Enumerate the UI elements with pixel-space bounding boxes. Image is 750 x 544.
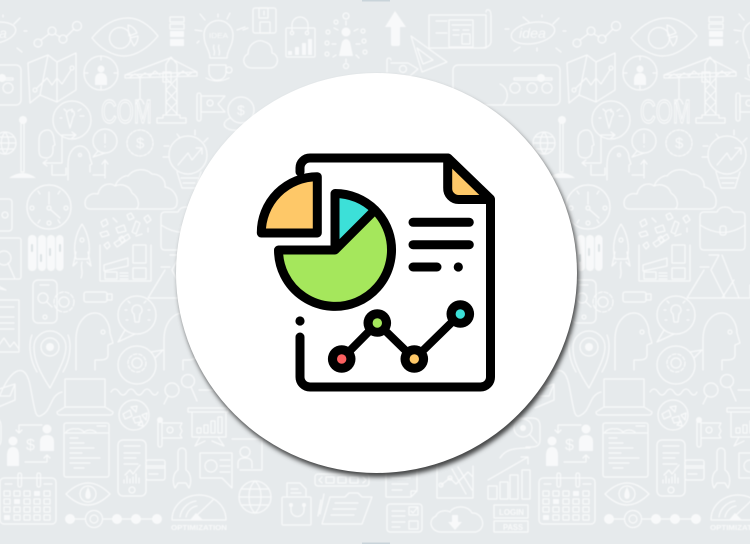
background doodle pattern: $ (136, 135, 145, 152)
orange quarter pie slice (261, 177, 317, 233)
background doodle pattern: OPTIMIZATION (171, 523, 227, 532)
background doodle pattern: LOGIN (499, 508, 524, 517)
background doodle pattern: $ (26, 437, 35, 454)
folded page corner (448, 158, 490, 200)
text lines (413, 222, 469, 272)
background doodle pattern: idea (519, 25, 546, 41)
line chart (328, 300, 474, 373)
background doodle pattern: COM (640, 93, 691, 130)
pie chart (278, 193, 391, 306)
white circle panel (176, 73, 577, 473)
document outline (295, 158, 490, 387)
background doodle pattern: $ (565, 437, 574, 454)
background doodle pattern: $ (675, 135, 684, 152)
background doodle pattern: $ (237, 102, 245, 118)
background doodle pattern: IDEA (209, 33, 228, 40)
background doodle pattern: COM (101, 93, 152, 130)
background doodle pattern: PASS (503, 523, 524, 532)
